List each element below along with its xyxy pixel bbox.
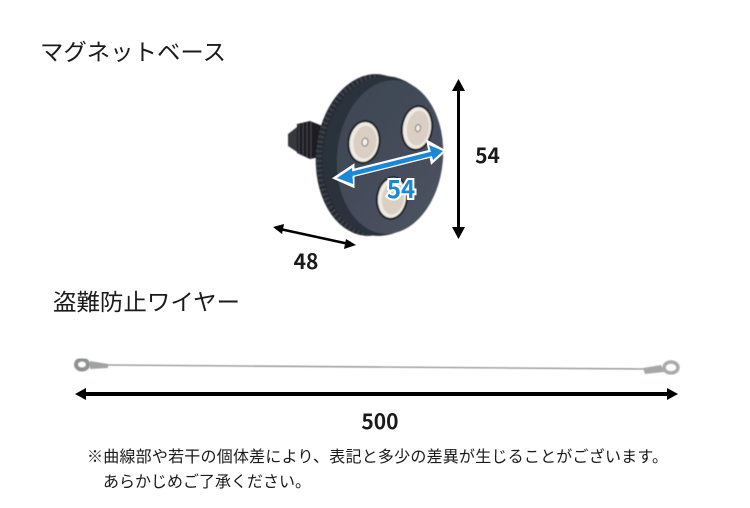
- blue label 54: 54: [387, 170, 415, 205]
- title: anti-theft wire: 盗難防止ワイヤー: [53, 289, 240, 315]
- note text: あらかじめご了承ください。: [103, 473, 311, 491]
- blue width arrow: [335, 142, 444, 186]
- depth label 48: 48: [294, 246, 318, 276]
- knob stem: [288, 121, 325, 159]
- disc chamfer: [316, 71, 448, 241]
- depth arrow: [273, 224, 356, 249]
- magnet: upper right: [398, 103, 436, 153]
- magnet: bottom: [373, 174, 411, 222]
- note text: ※曲線部や若干の個体差により、表記と多少の差異が生じることがございます。: [87, 447, 668, 466]
- magnet: upper left: [345, 118, 383, 166]
- disc face: [330, 76, 450, 238]
- title: magnet base: マグネットベース: [40, 39, 226, 65]
- height label 54: 54: [475, 140, 500, 170]
- height arrow: [452, 79, 465, 239]
- wire photo: [76, 360, 678, 374]
- length arrow: [75, 388, 678, 400]
- note text: [87, 447, 668, 491]
- product photo: magnet base: [288, 69, 450, 241]
- length label 500: 500: [361, 406, 399, 436]
- disc knurled rim: [314, 73, 389, 237]
